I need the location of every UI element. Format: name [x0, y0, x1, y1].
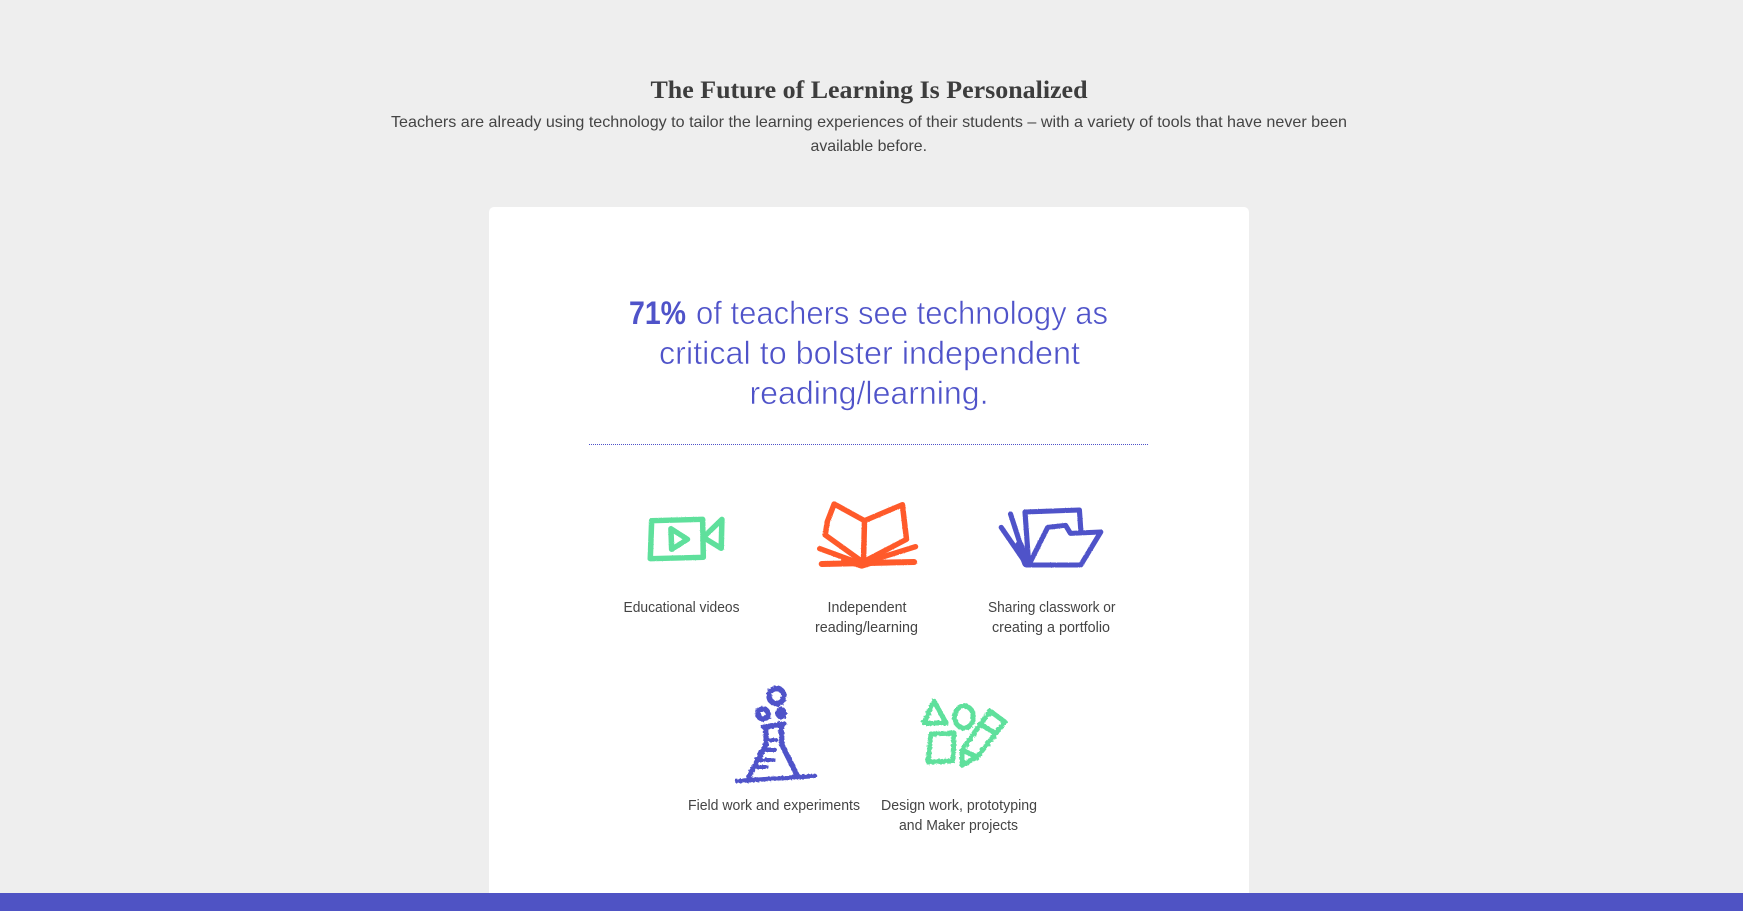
headline statistic: of teachers see technology as [696, 295, 1108, 331]
label: design work [881, 798, 1037, 834]
subtitle text: available before. [810, 138, 927, 155]
label: design work: and Maker projects [899, 818, 1018, 834]
bottom bar [0, 893, 1743, 911]
title: The Future of Learning Is Personalized [650, 77, 1088, 104]
label: sharing classwork [988, 600, 1116, 636]
label: field work: Field work and experiments [688, 798, 860, 814]
icon: folder with papers [1001, 510, 1101, 565]
label: educational videos: Educational videos [624, 600, 740, 616]
panel: white card [489, 207, 1249, 907]
label: sharing classwork: creating a portfolio [992, 620, 1110, 636]
headline statistic: 71% [629, 295, 686, 331]
label: independent reading: reading/learning [815, 620, 918, 636]
icon: video camera [650, 519, 722, 559]
label: sharing classwork: Sharing classwork or [988, 600, 1116, 616]
headline statistic: critical to bolster independent [659, 335, 1080, 371]
headline statistic [629, 295, 1108, 411]
subtitle text: Teachers are already using technology to tailor the learning experiences of their students – with a variety of tools that have never been [391, 114, 1347, 131]
label: independent reading: Independent [828, 600, 906, 616]
icon: science flask [737, 688, 815, 781]
label: design work: Design work, prototyping [881, 798, 1037, 814]
icon: shapes and pencil [924, 701, 1005, 765]
subtitle text [391, 114, 1347, 155]
label: independent reading [815, 600, 918, 636]
headline statistic: reading/learning. [750, 375, 988, 411]
icon: open book [820, 504, 915, 565]
